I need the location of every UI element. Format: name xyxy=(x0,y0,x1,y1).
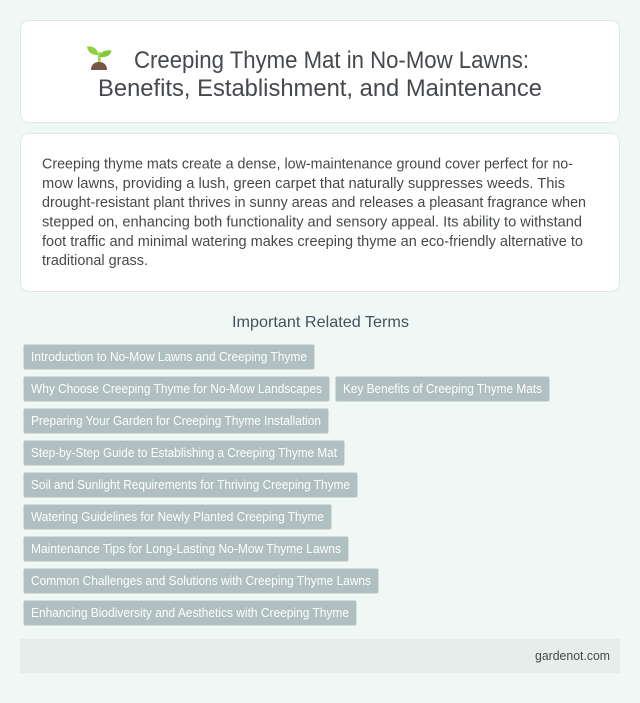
tag xyxy=(24,344,314,370)
description text xyxy=(42,156,586,269)
tag: Common Challenges and Solutions with Creeping Thyme Lawns xyxy=(31,574,371,588)
tag xyxy=(24,440,344,466)
tag xyxy=(24,600,356,626)
footer text: gardenot.com xyxy=(535,649,610,663)
tag xyxy=(24,408,328,434)
tag: Maintenance Tips for Long-Lasting No-Mow Thyme Lawns xyxy=(31,542,341,556)
title: Creeping Thyme Mat in No-Mow Lawns: xyxy=(134,47,529,74)
title xyxy=(98,47,542,102)
description text: Creeping thyme mats create a dense, low-maintenance ground cover perfect for no- xyxy=(42,156,573,172)
tag xyxy=(24,568,378,594)
tag xyxy=(24,504,332,530)
tag: Introduction to No-Mow Lawns and Creeping Thyme xyxy=(31,350,307,364)
tag: Soil and Sunlight Requirements for Thriving Creeping Thyme xyxy=(31,478,350,492)
tag: Key Benefits of Creeping Thyme Mats xyxy=(343,382,542,396)
tag: Preparing Your Garden for Creeping Thyme Installation xyxy=(31,414,321,428)
tag: Enhancing Biodiversity and Aesthetics with Creeping Thyme xyxy=(31,606,349,620)
tag xyxy=(336,376,550,402)
tag list xyxy=(24,344,550,626)
icon: seedling xyxy=(87,46,112,70)
footer bar xyxy=(20,639,620,673)
description text: drought-resistant plant thrives in sunny areas and releases a pleasant fragrance when xyxy=(42,194,586,211)
description text: stepped on, enhancing both functionality and sensory appeal. Its ability to withstand xyxy=(42,214,582,230)
tag: Why Choose Creeping Thyme for No-Mow Landscapes xyxy=(31,382,322,396)
tag: Watering Guidelines for Newly Planted Creeping Thyme xyxy=(31,510,324,524)
description text: traditional grass. xyxy=(42,252,148,269)
description text: mow lawns, providing a lush, green carpet that naturally suppresses weeds. This xyxy=(42,175,565,192)
panel: description xyxy=(20,134,620,292)
tag xyxy=(24,472,358,498)
title: Benefits, Establishment, and Maintenance xyxy=(98,75,542,102)
tag xyxy=(24,536,348,562)
tag xyxy=(24,376,330,402)
tag: Step-by-Step Guide to Establishing a Creeping Thyme Mat xyxy=(31,446,337,460)
description text: foot traffic and minimal watering makes creeping thyme an eco-friendly alternative to xyxy=(42,233,583,250)
panel: title card xyxy=(20,20,620,122)
heading: important related terms: Important Related Terms xyxy=(232,314,409,331)
